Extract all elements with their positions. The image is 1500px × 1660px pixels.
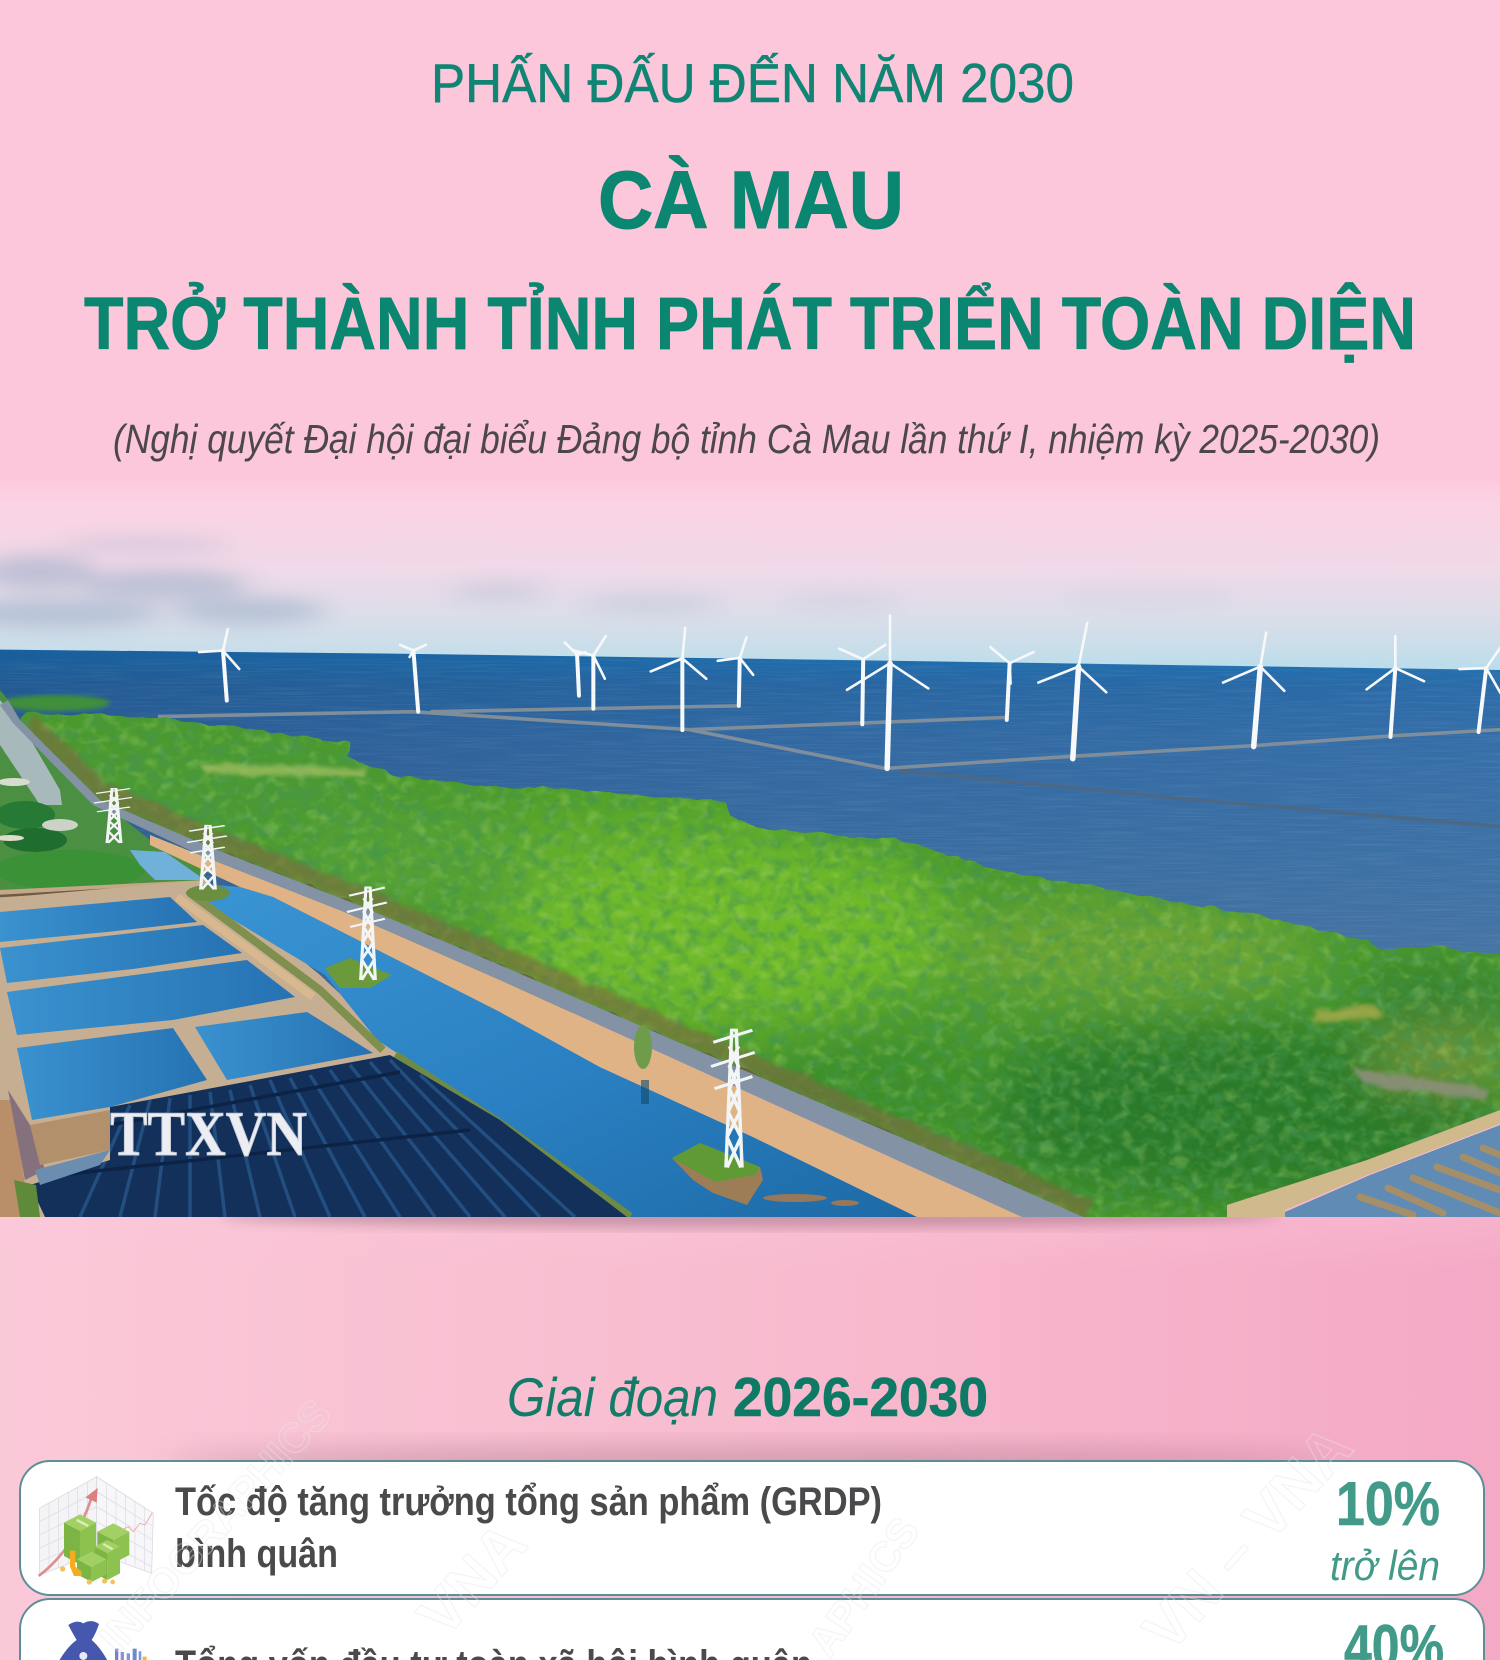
section heading: period: Giai đoạn — [507, 1366, 718, 1428]
shrimp ponds — [0, 897, 373, 1120]
stack A — [64, 1514, 96, 1531]
sky, sea and turbines — [0, 480, 1500, 1013]
mud flats in canal — [763, 1194, 859, 1206]
forest underlay behind tree edges — [34, 734, 1011, 1185]
kicker heading: PHẤN ĐẤU ĐẾN NĂM 2030 — [431, 52, 1074, 114]
TTXVN photo watermark: TTXVN — [110, 1098, 307, 1169]
title block — [84, 52, 1416, 462]
icon: money bag with bars — [55, 1621, 147, 1660]
clouds — [0, 532, 850, 634]
wind farm walkways — [158, 706, 1500, 827]
aerial photo: wind farm, mangrove forest and shrimp ponds — [0, 480, 1500, 1230]
canal — [185, 885, 917, 1217]
sky — [0, 480, 1500, 674]
label: GRDP growth: bình quân — [175, 1532, 338, 1576]
value: 10% or more: trở lên — [1330, 1542, 1440, 1589]
coastal road — [0, 700, 1083, 1217]
photo shadow — [220, 1204, 1280, 1228]
label: GRDP growth: Tốc độ tăng trưởng tổng sản phẩm (GRDP) — [175, 1480, 882, 1524]
stack D — [77, 1552, 106, 1567]
stack B — [97, 1523, 129, 1540]
black-net covered ponds — [30, 1055, 630, 1217]
wind turbines — [199, 616, 1500, 768]
main heading: Cà Mau: CÀ MAU — [598, 155, 904, 246]
label: GRDP growth — [175, 1480, 882, 1576]
card: GRDP growth — [20, 1461, 1484, 1595]
ground under ponds — [0, 880, 627, 1217]
icon: money stacks with rising arrow — [39, 1477, 153, 1585]
section heading: period — [507, 1366, 988, 1428]
sand bank — [150, 835, 1022, 1217]
canal bank vegetation — [190, 893, 383, 1050]
bottom-right fish farm — [1227, 1110, 1500, 1217]
card: total social investment — [20, 1599, 1484, 1660]
power pylons on islands — [94, 789, 763, 1205]
stack C — [95, 1540, 120, 1553]
watermark across cards: VNA — [405, 1510, 539, 1649]
palm tree on sand bank — [634, 1025, 652, 1104]
card shadow — [165, 1448, 1335, 1480]
section heading: period: 2026-2030 — [733, 1366, 988, 1428]
value: 10% or more — [1330, 1470, 1440, 1589]
shore strip with houses and small canal — [0, 690, 205, 910]
watermark across cards: VN – VNA — [1130, 1413, 1365, 1660]
clearings — [200, 763, 1490, 1100]
watermark across cards — [90, 1390, 1365, 1660]
mangrove forest — [0, 700, 1500, 1230]
watermark across cards: INFOGRAPHICS — [90, 1390, 340, 1660]
tree trunks along the road — [30, 722, 1090, 1210]
mud and tarp at pond corner — [0, 1090, 110, 1217]
sea — [0, 650, 1500, 1013]
value: 10% or more: 10% — [1336, 1470, 1440, 1539]
